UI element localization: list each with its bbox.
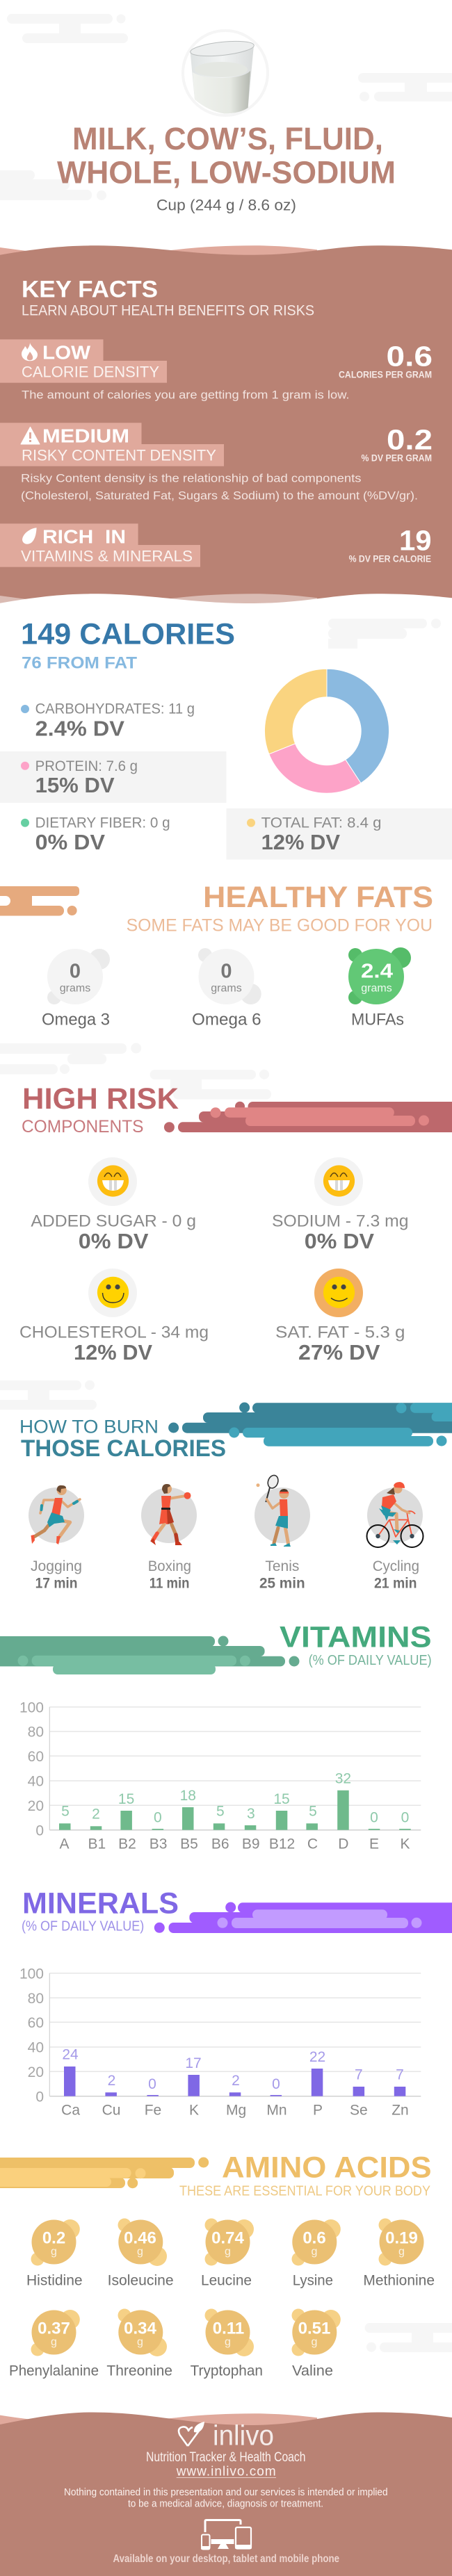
heading: calories: 149 CALORIES (21, 618, 235, 651)
bar chart: minerals: 2 (108, 2073, 115, 2089)
description: risky content density: Risky Content density is the relationship of bad components (21, 471, 362, 484)
serving size: Cup (244 g / 8.6 oz) (156, 197, 296, 214)
bar chart: vitamins: 5 (216, 1804, 225, 1820)
bar chart: minerals: 0 (35, 2089, 44, 2105)
amino acid: isoleucine: g (137, 2246, 143, 2258)
bar chart: vitamins: 3 (247, 1806, 255, 1822)
bar chart: vitamins: K (400, 1836, 410, 1852)
legend: protein: PROTEIN: 7.6 g (35, 758, 138, 774)
amino acid: tryptophan: Tryptophan (191, 2363, 263, 2379)
badge: omega 3: Omega 3 (42, 1010, 110, 1029)
decorative bars: amino acids (0, 2158, 209, 2188)
subheading: healthy fats: SOME FATS MAY BE GOOD FOR YOU (127, 915, 433, 935)
tag: rich in vitamins and minerals: VITAMINS & MINERALS (21, 547, 193, 564)
tag: medium risky content density: MEDIUM (42, 425, 129, 447)
amino acid: threonine: g (137, 2336, 143, 2348)
bar chart: minerals: 60 (28, 2015, 44, 2031)
bar chart: minerals: 24 (62, 2047, 79, 2063)
panel: healthy fats (42, 881, 433, 1029)
background cloud: amino acids (364, 2323, 452, 2352)
decorative bars: high risk (164, 1102, 452, 1132)
panel: key facts (0, 245, 452, 612)
panel: footer (0, 2412, 452, 2576)
bar chart: vitamins: 20 (28, 1798, 44, 1814)
legend: protein (21, 758, 138, 797)
legend: total fat: 12% DV (261, 831, 341, 854)
hero: glass of milk (183, 31, 268, 115)
stat: calories per gram (339, 341, 433, 380)
decorative bars: vitamins (0, 1636, 299, 1674)
bar chart: minerals: 100 (19, 1966, 44, 1982)
bar chart: minerals: Ca (61, 2103, 80, 2119)
bar chart: vitamins: 5 (309, 1804, 317, 1820)
description: risky content density (21, 471, 418, 502)
bar chart: vitamins: B12 (269, 1836, 295, 1852)
amino acid: threonine: 0.34 (124, 2319, 157, 2338)
donut chart (264, 669, 389, 793)
tag: rich in vitamins and minerals (0, 523, 200, 567)
legend: carbohydrates: 2.4% DV (35, 717, 125, 740)
badge: omega 3 (42, 949, 110, 1029)
background cloud: top left (7, 14, 128, 43)
bar chart: minerals: Cu (102, 2103, 120, 2119)
background cloud: above high risk right (150, 1070, 271, 1100)
stat: percent DV per gram: 0.2 (387, 424, 433, 456)
bar chart: vitamins: 100 (19, 1699, 44, 1715)
amino acid: phenylalanine (9, 2310, 99, 2379)
amino acid: isoleucine (108, 2219, 174, 2289)
amino acid: histidine: 0.2 (42, 2228, 65, 2247)
legend: dietary fiber: 0% DV (35, 831, 106, 854)
stat: calories per gram: CALORIES PER GRAM (339, 369, 432, 380)
bar chart: vitamins: B1 (88, 1836, 106, 1852)
stat: percent DV per calorie: % DV PER CALORIE (349, 553, 431, 564)
panel: how to burn those calories (19, 1417, 423, 1591)
panel: amino acids (9, 2151, 435, 2379)
legend: carbohydrates: CARBOHYDRATES: 11 g (35, 701, 195, 717)
tag: low calorie density: CALORIE DENSITY (22, 364, 159, 381)
title: WHOLE, LOW-SODIUM (57, 154, 396, 190)
amino acid: valine: 0.51 (298, 2319, 330, 2338)
bar chart: vitamins: 0 (35, 1823, 44, 1839)
amino acid: threonine: Threonine (106, 2363, 172, 2379)
legend: protein: 15% DV (35, 774, 115, 797)
activity: cycling (367, 1482, 423, 1591)
item: sodium: 0% DV (305, 1230, 375, 1253)
amino acid: methionine: g (398, 2246, 405, 2258)
badge: omega 6: grams (211, 983, 242, 995)
item: cholesterol: CHOLESTEROL - 34 mg (19, 1323, 209, 1342)
amino acid: isoleucine: Isoleucine (108, 2273, 174, 2289)
bar chart: minerals: Mn (266, 2103, 287, 2119)
tag: low calorie density: LOW (42, 342, 91, 364)
panel: calories (0, 618, 452, 860)
activity: boxing: Boxing (148, 1558, 191, 1574)
bar chart: vitamins: B2 (118, 1836, 136, 1852)
tagline: Nutrition Tracker & Health Coach (146, 2450, 306, 2465)
item: added sugar: ADDED SUGAR - 0 g (31, 1212, 196, 1230)
subheading: minerals percent of daily value: (% OF DAILY VALUE) (22, 1918, 144, 1934)
legend: total fat: TOTAL FAT: 8.4 g (261, 815, 381, 831)
amino acid: methionine: 0.19 (385, 2228, 418, 2247)
bar chart: vitamins: B5 (180, 1836, 198, 1852)
bar chart: minerals: 20 (28, 2064, 44, 2080)
description: calorie density: The amount of calories you are getting from 1 gram is low. (22, 388, 350, 401)
item: cholesterol (19, 1269, 209, 1364)
bar chart: vitamins: 40 (28, 1774, 44, 1790)
subheading: amino acids: THESE ARE ESSENTIAL FOR YOUR BODY (179, 2183, 430, 2199)
bar chart: minerals: 7 (355, 2067, 363, 2083)
bar chart: minerals: K (189, 2103, 199, 2119)
item: sodium: SODIUM - 7.3 mg (272, 1212, 409, 1230)
amino acid: valine: Valine (292, 2363, 333, 2379)
bar chart: vitamins: 0 (154, 1810, 162, 1826)
tag: medium risky content density (0, 423, 224, 466)
background cloud: above high risk left (0, 1043, 141, 1075)
item: cholesterol: 12% DV (74, 1341, 153, 1364)
activity: jogging: Jogging (31, 1558, 82, 1574)
decorative bars: minerals (154, 1902, 452, 1933)
amino acid: tryptophan (191, 2309, 263, 2379)
panel: high risk components (19, 1082, 409, 1364)
amino acid: leucine: 0.74 (211, 2228, 245, 2247)
badge: MUFAs: grams (361, 983, 392, 995)
bar chart: minerals: 40 (28, 2040, 44, 2056)
badge: omega 3: 0 (70, 961, 81, 983)
amino acid: histidine: Histidine (26, 2273, 83, 2289)
bar chart: vitamins: B9 (242, 1836, 260, 1852)
bar chart: minerals: 22 (309, 2049, 325, 2065)
amino acid: phenylalanine: Phenylalanine (9, 2363, 99, 2379)
disclaimer (64, 2486, 388, 2510)
background cloud: behind title (0, 170, 106, 200)
heading: how to burn: HOW TO BURN (19, 1417, 159, 1437)
bar chart: minerals: 0 (148, 2076, 156, 2092)
website link: www.inlivo.com (176, 2464, 276, 2479)
activity: jogging: 17 min (35, 1575, 78, 1591)
item: added sugar (31, 1157, 196, 1253)
legend: dietary fiber: DIETARY FIBER: 0 g (35, 815, 170, 831)
decorative bars: burn calories (168, 1403, 452, 1446)
item: saturated fat: 27% DV (298, 1341, 380, 1364)
tag: low calorie density (0, 339, 167, 383)
disclaimer: Nothing contained in this presentation and our services is intended or implied (64, 2486, 388, 2498)
legend: dietary fiber (21, 815, 170, 854)
bar chart: vitamins (19, 1699, 421, 1852)
amino acid: leucine: Leucine (201, 2273, 252, 2289)
bar chart: minerals: P (313, 2103, 323, 2119)
bar chart: vitamins: 60 (28, 1749, 44, 1765)
bar chart: vitamins: 32 (335, 1771, 351, 1787)
amino acid: valine (292, 2309, 341, 2379)
badge: MUFAs: MUFAs (351, 1010, 404, 1029)
bar chart: vitamins: B3 (150, 1836, 167, 1852)
bar chart: vitamins: 80 (28, 1725, 44, 1741)
amino acid: methionine: Methionine (363, 2273, 435, 2289)
activity: boxing: 11 min (150, 1575, 189, 1591)
badge: MUFAs: 2.4 (361, 961, 393, 983)
amino acid: lysine (292, 2219, 341, 2289)
availability note: Available on your desktop, tablet and mobile phone (113, 2553, 339, 2565)
tag: rich in vitamins and minerals: RICH IN (42, 526, 126, 548)
bar chart: minerals (19, 1966, 421, 2119)
heading: high risk: HIGH RISK (22, 1082, 179, 1116)
legend: carbohydrates (21, 701, 195, 740)
stat: percent DV per gram: % DV PER GRAM (362, 453, 432, 463)
subheading: calories from fat: 76 FROM FAT (22, 654, 137, 673)
amino acid: lysine: Lysine (293, 2273, 333, 2289)
stat: calories per gram: 0.6 (387, 341, 433, 373)
amino acid: phenylalanine: g (51, 2336, 57, 2348)
activity: tennis: 25 min (259, 1575, 305, 1591)
bar chart: vitamins: 5 (61, 1804, 70, 1820)
amino acid: isoleucine: 0.46 (124, 2228, 156, 2247)
amino acid: histidine: g (51, 2246, 57, 2258)
icon: devices (201, 2520, 252, 2550)
amino acid: lysine: 0.6 (302, 2228, 326, 2247)
bar chart: minerals: 0 (272, 2076, 280, 2092)
bar chart: vitamins: E (369, 1836, 379, 1852)
heading: amino acids: AMINO ACIDS (222, 2151, 432, 2185)
subheading: vitamins percent of daily value: (% OF DAILY VALUE) (309, 1653, 432, 1668)
heading: vitamins: VITAMINS (280, 1620, 432, 1654)
amino acid: threonine (106, 2309, 172, 2379)
amino acid: histidine (26, 2219, 83, 2289)
subheading: components: COMPONENTS (22, 1117, 143, 1136)
amino acid: tryptophan: 0.11 (213, 2319, 244, 2338)
bar chart: minerals: 17 (185, 2055, 202, 2071)
heading: key facts: KEY FACTS (22, 276, 158, 302)
badge: MUFAs (348, 947, 411, 1029)
stat: percent DV per calorie (349, 525, 432, 564)
background cloud: top right (358, 73, 452, 101)
bar chart: minerals: 80 (28, 1991, 44, 2007)
background cloud: calories (328, 619, 441, 649)
description: risky content density: (Cholesterol, Saturated Fat, Sugars & Sodium) to the amount (%DV/gr). (21, 489, 418, 502)
badge: omega 3: grams (60, 983, 90, 995)
activity: boxing (141, 1484, 197, 1591)
heading: minerals: MINERALS (22, 1887, 179, 1921)
disclaimer: to be a medical advice, diagnosis or treatment. (128, 2498, 323, 2510)
logo: inlivo (179, 2419, 274, 2451)
bar chart: vitamins: 0 (401, 1810, 409, 1826)
bar chart: minerals: Mg (226, 2103, 246, 2119)
grey row: protein (0, 751, 227, 803)
bar chart: vitamins: 0 (370, 1810, 378, 1826)
badge: omega 6: Omega 6 (192, 1010, 261, 1029)
activity: cycling: Cycling (373, 1558, 419, 1574)
bar chart: vitamins: 18 (180, 1788, 196, 1804)
bar chart: vitamins: 15 (118, 1791, 134, 1807)
activity: jogging (29, 1485, 84, 1591)
activity: tennis: Tenis (265, 1558, 299, 1574)
bar chart: vitamins: 2 (92, 1807, 100, 1823)
bar chart: minerals: Se (350, 2103, 368, 2119)
grey row: total fat (227, 808, 452, 860)
bar chart: minerals: 7 (396, 2067, 404, 2083)
bar chart: vitamins: D (338, 1836, 348, 1852)
bar chart: vitamins: 15 (273, 1791, 290, 1807)
item: saturated fat (275, 1269, 405, 1364)
bar chart: minerals: Zn (392, 2103, 409, 2119)
heading: healthy fats: HEALTHY FATS (203, 881, 433, 914)
stat: percent DV per calorie: 19 (399, 525, 432, 557)
title (57, 121, 396, 190)
amino acid: leucine (201, 2219, 254, 2289)
bar chart: minerals: Fe (145, 2103, 161, 2119)
stat: percent DV per gram (362, 424, 433, 463)
amino acid: tryptophan: g (225, 2336, 231, 2348)
bar chart: minerals: 2 (232, 2073, 240, 2089)
decorative bars: healthy fats (0, 886, 79, 916)
activity: tennis (255, 1474, 310, 1591)
tag: medium risky content density: RISKY CONTENT DENSITY (22, 447, 216, 464)
amino acid: phenylalanine: 0.37 (38, 2319, 70, 2338)
bar chart: vitamins: B6 (211, 1836, 229, 1852)
title: MILK, COW’S, FLUID, (72, 121, 383, 156)
badge: omega 6 (192, 948, 261, 1029)
bar chart: vitamins: C (307, 1836, 318, 1852)
amino acid: methionine (363, 2219, 435, 2289)
subheading: key facts: LEARN ABOUT HEALTH BENEFITS OR RISKS (22, 302, 314, 318)
legend: total fat (247, 815, 381, 854)
item: saturated fat: SAT. FAT - 5.3 g (275, 1323, 405, 1342)
bar chart: vitamins: A (59, 1836, 70, 1852)
heading: those calories: THOSE CALORIES (21, 1435, 226, 1462)
badge: omega 6: 0 (220, 961, 232, 983)
background cloud: burn (0, 1380, 97, 1410)
item: added sugar: 0% DV (79, 1230, 149, 1253)
amino acid: valine: g (312, 2336, 317, 2348)
item: sodium (272, 1157, 409, 1253)
activity: cycling: 21 min (374, 1575, 417, 1591)
logo: inlivo: inlivo (213, 2419, 274, 2451)
amino acid: leucine: g (225, 2246, 231, 2258)
amino acid: lysine: g (312, 2246, 317, 2258)
